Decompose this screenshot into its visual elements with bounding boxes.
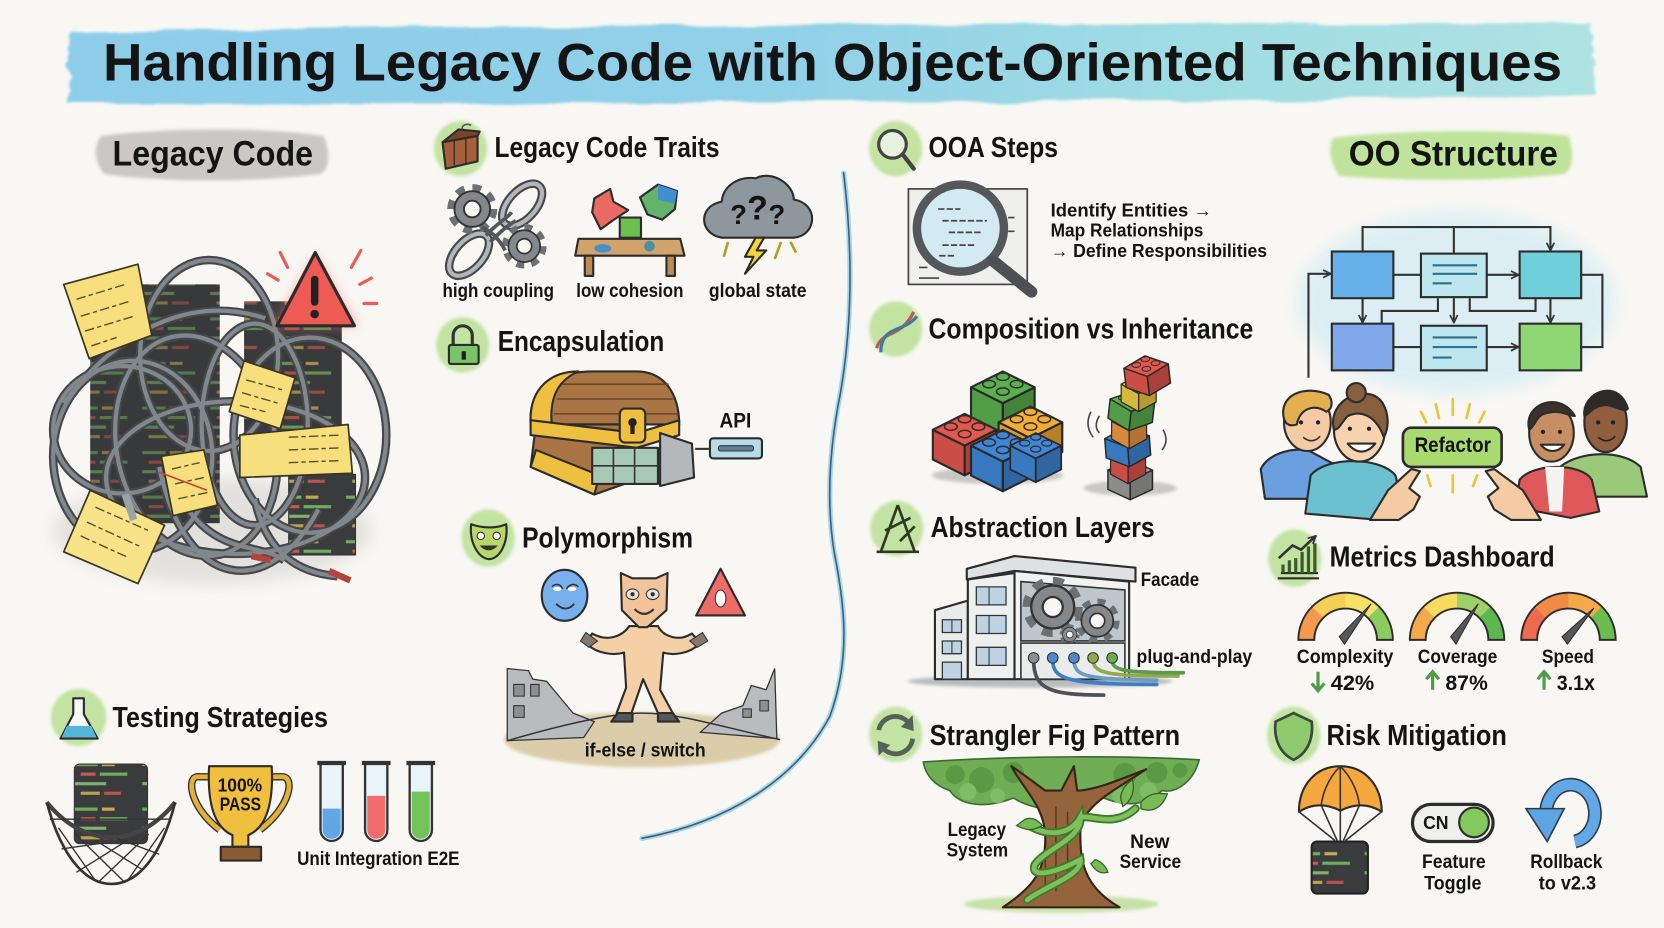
composition heading: Composition vs Inheritance [929, 314, 1253, 346]
label global state: global state [709, 281, 807, 302]
encapsulation heading: Encapsulation [498, 326, 664, 358]
gauge speed [1521, 593, 1616, 644]
label rollback: to v2.3 [1539, 873, 1596, 894]
title [66, 23, 1595, 104]
label complexity: 42% [1331, 672, 1374, 695]
label feature toggle: Feature [1422, 852, 1486, 873]
title text: Handling Legacy Code with Object-Oriented Techniques [103, 34, 1562, 93]
label feature toggle: Toggle [1424, 873, 1481, 894]
label facade: Facade [1141, 570, 1199, 591]
icon: rollback arrow [1526, 785, 1595, 842]
icon: flask [51, 689, 106, 746]
panel: metrics dashboard [1268, 530, 1616, 695]
label coverage [1418, 647, 1497, 695]
panel: OO structure [1261, 131, 1647, 520]
gauge coverage [1410, 593, 1504, 644]
label new service: Service [1120, 852, 1181, 873]
traits heading: Legacy Code Traits [495, 132, 720, 164]
icon: abstraction compass [870, 501, 923, 556]
label legacy system: Legacy [948, 820, 1006, 841]
if-else label: if-else / switch [585, 741, 706, 762]
label speed: Speed [1542, 647, 1594, 668]
icon: low cohesion puzzle and table [575, 185, 684, 276]
divider curve [642, 173, 850, 838]
team: left people [1261, 383, 1403, 520]
figure with mask [581, 573, 708, 722]
label new service: New [1130, 832, 1170, 853]
icon: test tubes [317, 763, 435, 841]
label complexity: Complexity [1297, 647, 1394, 668]
label speed [1538, 647, 1595, 695]
panel: strangler fig pattern [869, 707, 1199, 913]
warning triangle [267, 250, 377, 327]
label new service [1120, 832, 1181, 873]
API label and port [695, 410, 762, 458]
label coverage: Coverage [1418, 647, 1497, 668]
refactor button [1403, 399, 1502, 492]
title brush band [66, 23, 1595, 104]
icon: small magnifier [869, 121, 922, 176]
panel: encapsulation [436, 317, 762, 495]
class diagram flowchart [1297, 212, 1615, 393]
icon: feature toggle: CN [1423, 813, 1449, 833]
icon: trophy: PASS [220, 795, 261, 815]
legacy code heading: Legacy Code [113, 135, 313, 174]
panel: legacy code [53, 129, 386, 584]
label low cohesion: low cohesion [576, 281, 683, 302]
icon: global state storm cloud [704, 176, 812, 274]
gauge complexity [1298, 593, 1393, 644]
label plug-and-play: plug-and-play [1137, 647, 1253, 668]
tree with vine [923, 757, 1199, 913]
icon: high coupling gears and chains [442, 177, 549, 283]
label complexity [1297, 647, 1394, 695]
icon: rising chart [1268, 530, 1321, 587]
panel: polymorphism [462, 509, 780, 767]
label legacy system: System [947, 840, 1008, 861]
hands pressing refactor [1370, 469, 1541, 520]
blue mask [542, 570, 587, 621]
API label and port: API [720, 410, 751, 433]
panel: risk mitigation [1267, 707, 1603, 894]
panel: abstraction layers [870, 501, 1253, 695]
icon: global state storm cloud: ? [747, 190, 768, 228]
icon: parachute with code box [1299, 766, 1382, 894]
test tube labels: Unit Integration E2E [297, 849, 460, 870]
OOA steps text: Map Relationships [1051, 221, 1203, 241]
icon: DNA helix [869, 301, 922, 357]
panel: testing strategies [47, 689, 460, 884]
document and magnifying glass [908, 185, 1032, 292]
icon: trophy [192, 766, 289, 861]
icon: code in safety net [47, 764, 175, 884]
icon: global state storm cloud: ? [768, 199, 785, 230]
label rollback: Rollback [1530, 852, 1603, 873]
sticky notes [64, 264, 352, 584]
icon: treasure chest [530, 371, 694, 495]
OOA steps text: → Define Responsibilities [1051, 241, 1267, 261]
icon: crate [434, 121, 487, 176]
icon: global state storm cloud: ? [730, 199, 747, 230]
abstraction heading: Abstraction Layers [931, 512, 1155, 544]
icon: mask [462, 509, 515, 567]
risk heading: Risk Mitigation [1327, 720, 1507, 752]
lego composition stack [932, 371, 1063, 491]
refactor button: Refactor [1415, 434, 1491, 457]
icon: padlock [436, 317, 489, 372]
icon: feature toggle [1412, 804, 1493, 842]
wobbly inheritance tower [1083, 354, 1177, 500]
panel: composition vs inheritance [869, 301, 1253, 500]
label legacy system [947, 820, 1008, 861]
icon: trophy: 100% [218, 776, 262, 796]
red triangle mask [696, 569, 745, 615]
label speed: 3.1x [1557, 672, 1595, 695]
team: right people [1515, 391, 1647, 518]
tangled code illustration [53, 250, 386, 584]
panel: OOA steps [869, 121, 1267, 292]
label high coupling: high coupling [443, 281, 554, 302]
polymorphism heading: Polymorphism [522, 523, 693, 555]
label coverage: 87% [1445, 672, 1488, 695]
OOA steps text: Identify Entities → [1051, 200, 1212, 220]
label rollback [1530, 852, 1603, 894]
metrics heading: Metrics Dashboard [1330, 542, 1555, 574]
facade building with gears [907, 556, 1183, 695]
OOA steps text [1051, 200, 1267, 261]
OOA heading: OOA Steps [929, 132, 1058, 164]
strangler heading: Strangler Fig Pattern [930, 720, 1180, 752]
testing heading: Testing Strategies [113, 702, 328, 734]
ground and ruins [504, 669, 780, 767]
OO structure heading: OO Structure [1349, 135, 1558, 174]
label feature toggle [1422, 852, 1486, 894]
panel: legacy code traits [434, 121, 812, 302]
icon: shield [1267, 707, 1320, 764]
icon: refresh arrows [869, 707, 922, 762]
